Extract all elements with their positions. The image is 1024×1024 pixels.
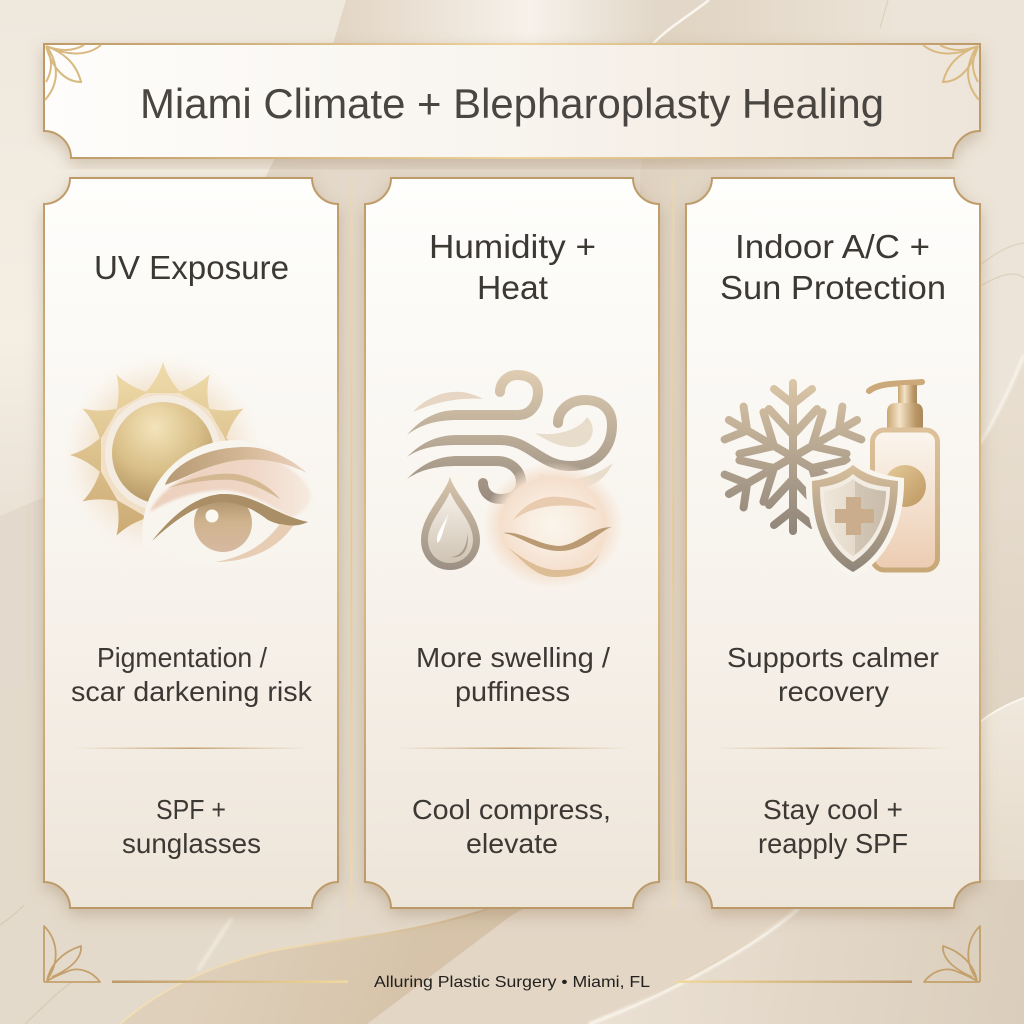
panel: indoor A/C and sun protection: recovery [778,676,889,707]
heading: Indoor A/C + [735,228,930,265]
body text: Pigmentation / [97,642,267,673]
icon: wind, droplet and puffy eye [407,375,623,588]
title banner [44,44,980,158]
panel: humidity and heat: Heat [477,269,548,306]
footer [44,926,980,991]
action text: Cool compress, [412,794,611,825]
panel: UV exposure: sunglasses [122,828,261,859]
footer corner leaves [44,926,980,982]
panel: UV exposure [44,178,338,908]
action text: Stay cool + [763,794,903,825]
action text: SPF + [156,794,226,825]
panel: indoor A/C and sun protection [686,178,980,908]
body text: Supports calmer [727,642,939,673]
panel: indoor A/C and sun protection: Sun Protection [720,269,946,306]
panel: indoor A/C and sun protection: reapply SPF [758,828,908,859]
panel: UV exposure: scar darkening risk [71,676,313,707]
icon: sun and eye [70,362,310,562]
heading: Humidity + [429,228,596,265]
panel: humidity and heat: puffiness [455,676,570,707]
title text: Miami Climate + Blepharoplasty Healing [140,80,884,127]
panel: humidity and heat [365,178,659,908]
title corner leaves [45,45,979,100]
footer text: Alluring Plastic Surgery • Miami, FL [374,974,650,991]
column divider lines [350,178,674,908]
panel: humidity and heat: elevate [466,828,558,859]
icon: snowflake, shield and sunscreen bottle [720,379,940,572]
heading: UV Exposure [94,249,289,286]
body text: More swelling / [416,642,610,673]
